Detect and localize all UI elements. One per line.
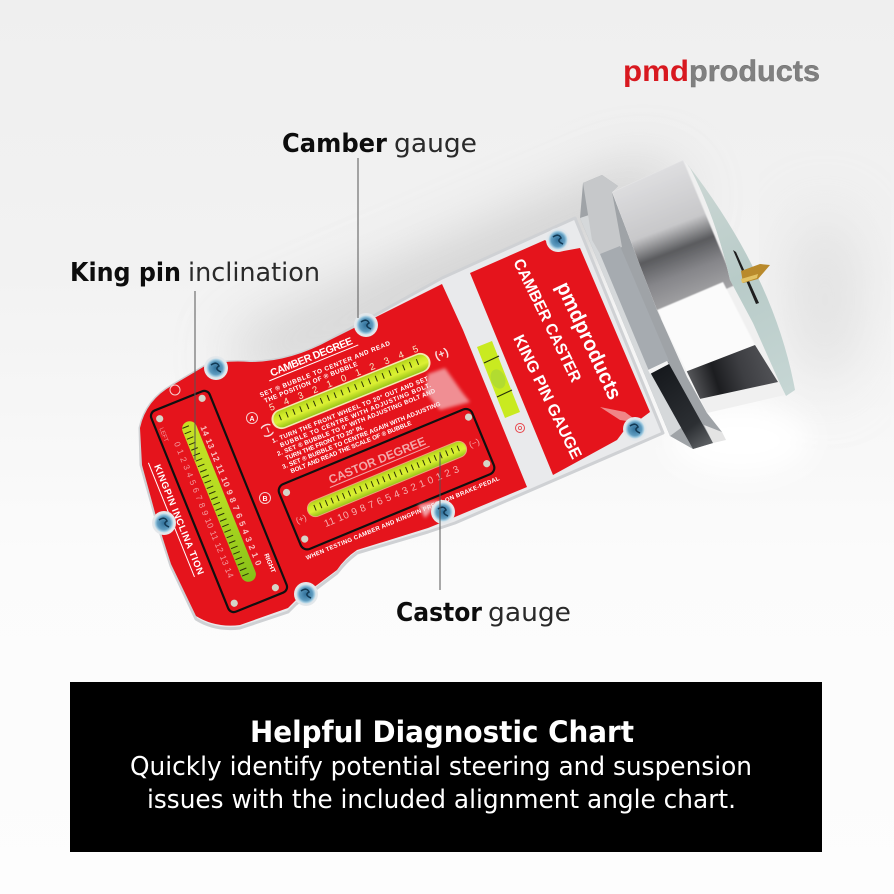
instructions: 3. SET ® BUBBLE TO CENTRE AGAIN WITH ADJUSTING	[281, 401, 442, 471]
screws	[152, 228, 647, 606]
plate text: pmdproducts	[551, 278, 626, 403]
callout: castor gauge: gauge	[488, 598, 571, 628]
callout: castor gauge: Castor	[396, 598, 482, 628]
metal cylinder	[612, 161, 780, 413]
castor box	[277, 407, 496, 552]
mounting disk	[688, 165, 795, 396]
aluminium body	[140, 218, 663, 629]
screw	[546, 228, 570, 252]
kingpin left scale: 0 1 2 3 4 5 6 7 8 9 10 11 12 13 14	[172, 440, 236, 580]
cylinder head with flange and disk	[580, 150, 800, 449]
camber tube	[268, 350, 434, 432]
panel body text	[130, 752, 752, 815]
castor tube	[304, 438, 470, 520]
screw	[431, 500, 455, 524]
cylinder white band	[657, 282, 756, 377]
logo: pmdproducts: products	[689, 55, 820, 88]
plate text	[509, 256, 626, 462]
camber heading: THE POSITION OF ® BUBBLE	[263, 360, 359, 405]
kingpin gauge: RIGHT	[262, 553, 276, 574]
logo: pmdproducts	[623, 55, 820, 88]
callout: castor gauge	[396, 452, 571, 628]
instructions: BOLT AND READ THE SCALE OF ® BUBBLE	[290, 420, 413, 475]
camber heading: SET ® BUBBLE TO CENTER AND READ	[259, 339, 392, 399]
letter B: B	[262, 496, 268, 503]
glare on instructions	[425, 368, 470, 410]
plate text: KING PIN GAUGE	[509, 332, 584, 462]
kingpin box	[149, 389, 289, 614]
instructions: TURN THE FRONT TO 20° IN.	[284, 424, 365, 462]
callout: king pin inclination	[70, 258, 320, 460]
box screws	[281, 412, 492, 544]
letter D	[516, 424, 524, 432]
kingpin gauge: LEFT	[157, 427, 169, 443]
kingpin gauge	[149, 389, 289, 614]
instructions: 1. TURN THE FRONT WHEEL TO 20° OUT AND SET	[271, 375, 430, 445]
screw	[204, 356, 228, 380]
instructions: BUBBLE TO CENTRE WITH ADJUSTING BOLT.	[279, 382, 432, 449]
kingpin tube	[180, 419, 258, 584]
flange dark face	[650, 362, 713, 449]
screw	[354, 313, 378, 337]
camber minus sign: (−)	[259, 422, 276, 439]
plate text: CAMBER CASTER	[509, 256, 584, 385]
flange edge	[580, 212, 685, 436]
glare streak	[600, 407, 640, 423]
logo: pmdproducts: pmd	[623, 55, 689, 88]
screw	[294, 582, 318, 606]
callout: king pin inclination: King pin	[70, 258, 181, 288]
callout: camber gauge: gauge	[394, 129, 477, 159]
flange upper face	[583, 175, 622, 254]
red plate: title	[470, 240, 650, 475]
castor scale: 11 10 9 8 7 6 5 4 3 2 1 0 1 2 3	[323, 464, 461, 530]
letter A	[246, 412, 258, 424]
callout: camber gauge	[282, 129, 477, 318]
callout: camber gauge: Camber	[282, 129, 387, 159]
glare near castor screw	[418, 500, 440, 518]
screw	[152, 511, 176, 535]
letter B	[260, 492, 270, 504]
cylinder top	[612, 160, 735, 320]
kingpin right scale: 14 13 12 11 10 9 8 7 6 5 4 3 2 1 0	[198, 424, 264, 567]
letter A: A	[250, 416, 255, 423]
castor footnote: WHEN TESTING CAMBER AND KINGPIN PRESS ON BRAKE-PEDAL	[305, 476, 501, 562]
castor gauge	[277, 407, 501, 562]
brass pin	[733, 250, 770, 304]
box screws	[154, 394, 283, 609]
camber gauge	[246, 303, 469, 477]
panel body text: issues with the included alignment angle chart.	[147, 785, 736, 815]
instructions	[271, 375, 445, 477]
castor heading: CASTOR DEGREE	[326, 434, 428, 487]
product: alignment gauge	[140, 150, 800, 629]
centre bubble level	[477, 341, 520, 418]
screw	[623, 417, 647, 441]
flange lower side	[600, 246, 669, 371]
cylinder dark band	[685, 345, 778, 400]
camber scale: 5 4 3 2 1 0 1 2 3 4 5	[268, 344, 420, 414]
red plate: gauges	[140, 284, 527, 626]
kingpin inclination label: KINGPIN INCLINA TION	[151, 463, 206, 577]
panel: helpful diagnostic chart	[70, 682, 822, 852]
callout: king pin inclination: inclination	[188, 258, 320, 288]
panel heading: Helpful Diagnostic Chart	[250, 715, 634, 749]
camber plus: (+)	[433, 346, 451, 362]
castor gauge: (+)	[294, 512, 308, 526]
instructions: 2. SET ® BUBBLE TO 0° WITH ADJUSTING BOLT AND	[276, 388, 437, 458]
camber heading	[252, 322, 394, 406]
panel body text: Quickly identify potential steering and suspension	[130, 752, 752, 782]
castor gauge: (−)	[467, 436, 481, 450]
camber heading: CAMBER DEGREE	[268, 335, 355, 379]
letter C	[170, 385, 180, 395]
flange backing	[580, 175, 722, 449]
